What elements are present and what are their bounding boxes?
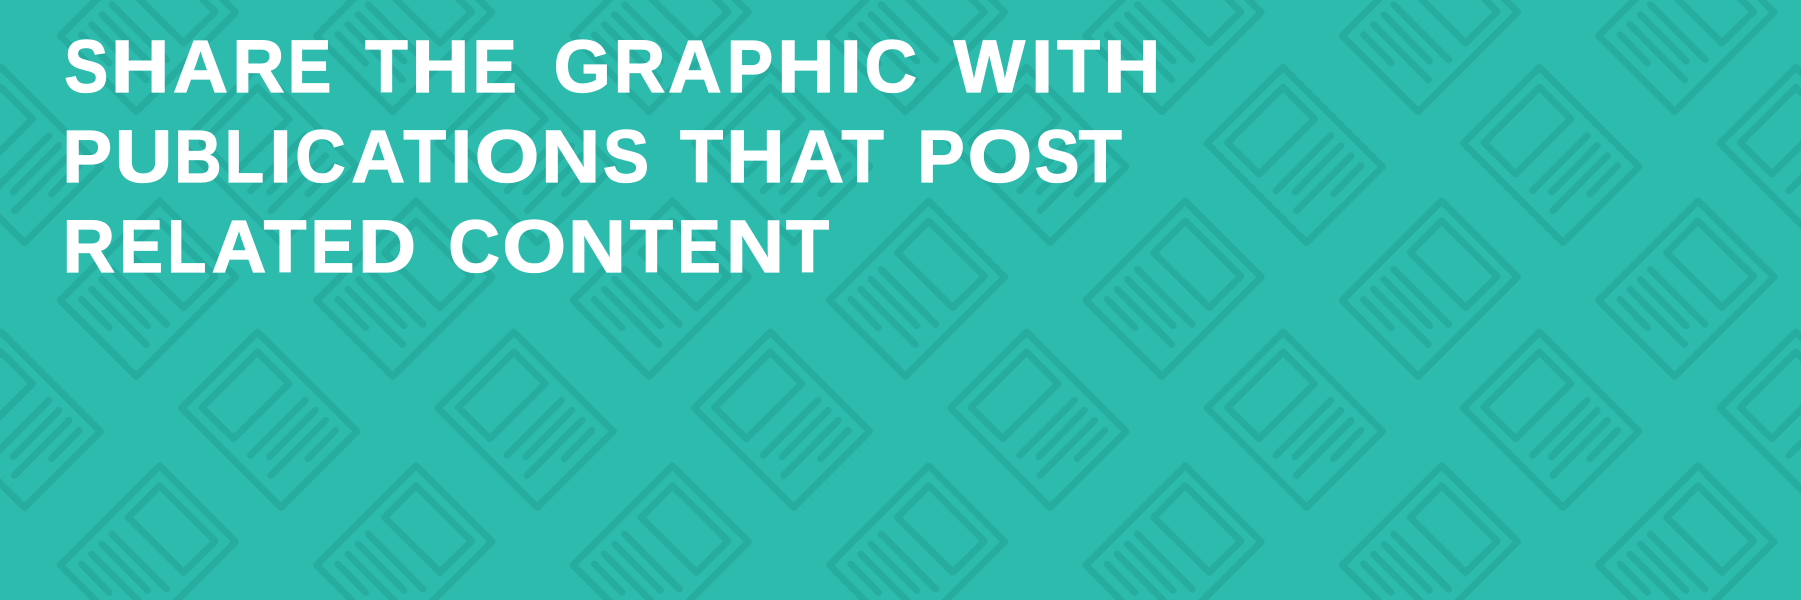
title: T: [680, 115, 723, 198]
title: E: [311, 205, 354, 288]
title: B: [174, 115, 222, 198]
title: A: [173, 25, 228, 108]
title: R: [63, 205, 115, 288]
title: H: [777, 25, 835, 108]
title: H: [111, 25, 170, 108]
title: O: [968, 115, 1032, 198]
title: I: [1031, 25, 1053, 108]
title: D: [358, 205, 416, 288]
title: I: [450, 115, 472, 198]
title: I: [840, 25, 862, 108]
title: H: [1103, 25, 1160, 108]
title: T: [630, 205, 673, 288]
title: E: [288, 25, 331, 108]
title: O: [502, 205, 566, 288]
title: R: [232, 25, 284, 108]
title: N: [541, 115, 600, 198]
title: P: [62, 115, 112, 198]
title: W: [954, 25, 1025, 108]
title: [62, 25, 1160, 288]
title: I: [269, 115, 292, 198]
title: C: [295, 115, 346, 198]
title: T: [786, 205, 829, 288]
title: R: [614, 25, 665, 108]
title: E: [119, 205, 163, 288]
title: C: [448, 205, 500, 288]
title: S: [1035, 115, 1080, 198]
title: N: [568, 205, 626, 288]
title: T: [264, 205, 306, 288]
title: P: [917, 115, 965, 198]
title: G: [554, 25, 611, 108]
title: E: [677, 205, 721, 288]
title: L: [167, 205, 206, 288]
title: E: [473, 25, 517, 108]
title: O: [475, 115, 539, 198]
title: A: [212, 205, 266, 288]
title: T: [1079, 115, 1122, 198]
title: S: [603, 115, 649, 198]
title: T: [842, 115, 884, 198]
title: P: [727, 25, 773, 108]
title: H: [411, 25, 470, 108]
title: C: [864, 25, 917, 108]
title: U: [115, 115, 172, 198]
title: T: [1057, 25, 1100, 108]
title: A: [668, 25, 722, 108]
title: H: [726, 115, 785, 198]
title: A: [789, 115, 844, 198]
title: A: [351, 115, 405, 198]
title: S: [64, 25, 108, 108]
title: L: [225, 115, 264, 198]
title: N: [726, 205, 784, 288]
title: T: [365, 25, 408, 108]
title: T: [403, 115, 446, 198]
